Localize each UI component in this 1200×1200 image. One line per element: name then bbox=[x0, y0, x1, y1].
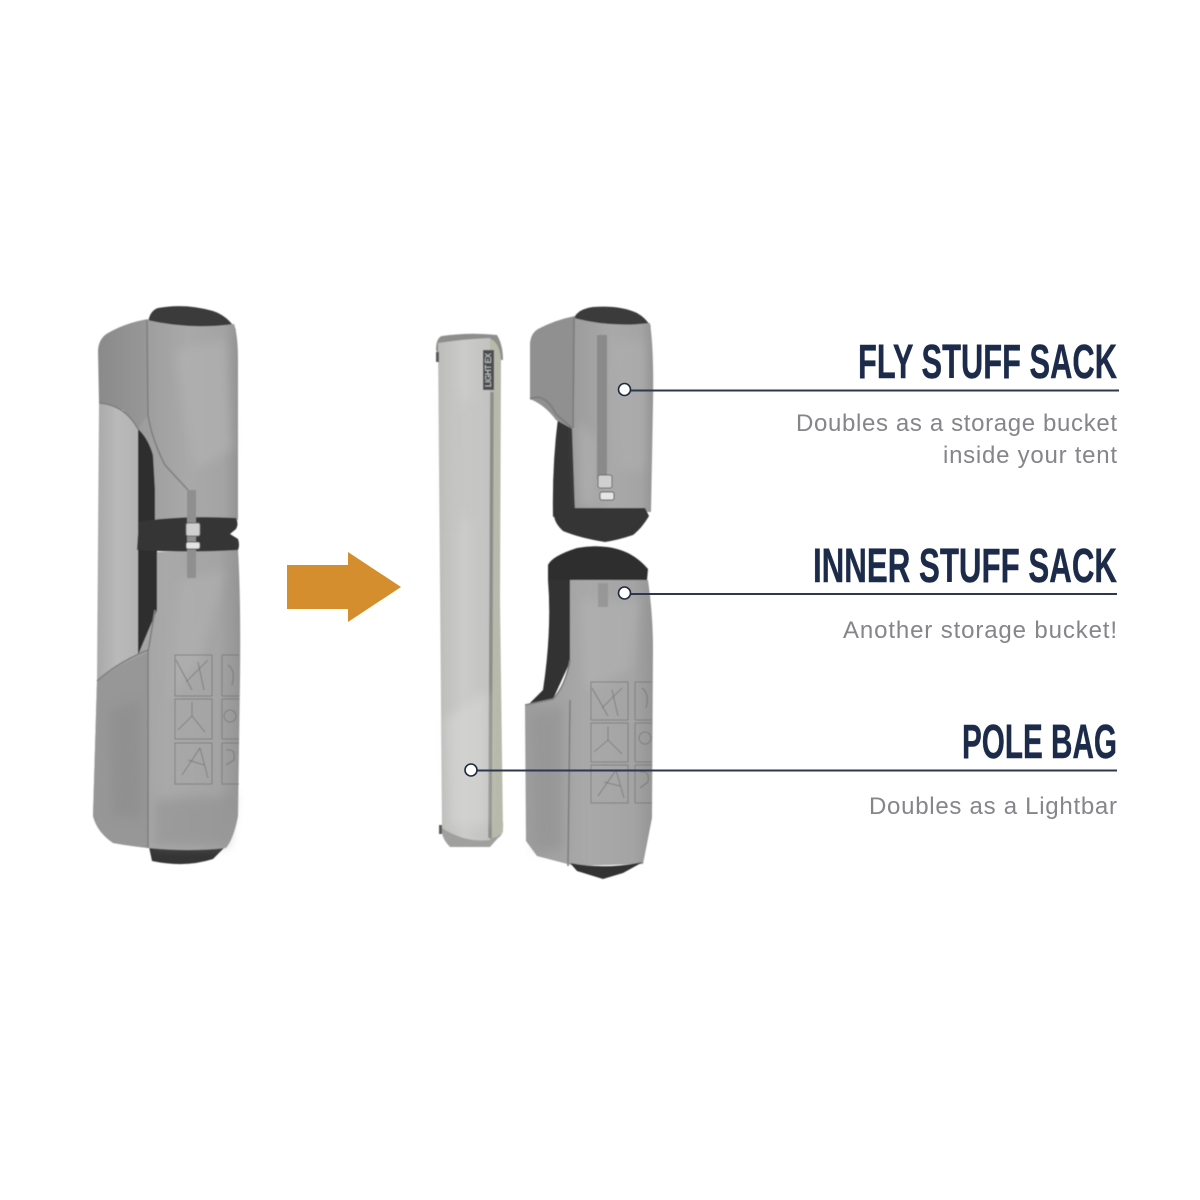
marker dot bbox=[618, 587, 630, 599]
marker dot bbox=[465, 764, 477, 776]
inner sack top cap bbox=[548, 546, 648, 580]
leader line bbox=[630, 390, 1119, 392]
fly sack body bbox=[572, 318, 653, 512]
inner sack body bbox=[525, 580, 653, 866]
bundle strap and buckle bbox=[186, 490, 200, 578]
bundle seams bbox=[97, 320, 188, 848]
fly sack buckle bbox=[598, 475, 614, 500]
inner sack soft folds bbox=[532, 600, 640, 850]
callout: fly stuff sack bbox=[618, 336, 1119, 469]
inner sack dark side bbox=[528, 580, 572, 705]
description: Doubles as a Lightbar bbox=[869, 793, 1117, 820]
bundle dark window bbox=[137, 428, 160, 655]
bundle top cap bbox=[148, 306, 236, 334]
packed tent bundle bbox=[93, 306, 240, 864]
pole bag bottom cuff bbox=[441, 822, 503, 847]
callout: pole bag bbox=[465, 716, 1117, 820]
fly sack strap bbox=[597, 335, 607, 479]
fly stuff sack bbox=[530, 307, 653, 542]
bundle upper sleeve side bbox=[98, 319, 156, 429]
bundle soft folds bbox=[110, 340, 235, 846]
pole bag top cuff bbox=[436, 334, 503, 360]
pole bag folds bbox=[445, 400, 488, 825]
inner stuff sack bbox=[525, 546, 653, 879]
pole bag label tag: LIGHT EX bbox=[484, 352, 493, 387]
fly sack top cap bbox=[574, 307, 651, 330]
pole bag green side strip bbox=[489, 338, 503, 838]
pole bag bbox=[436, 334, 503, 847]
bundle middle dark band bbox=[137, 517, 239, 552]
pole bag main body bbox=[438, 338, 490, 840]
bundle light panel bbox=[97, 403, 138, 681]
inner sack bottom cap bbox=[570, 862, 643, 879]
inner sack seams bbox=[525, 660, 570, 866]
description bbox=[796, 410, 1117, 469]
bundle bottom cap bbox=[148, 842, 229, 864]
description: Another storage bucket! bbox=[843, 617, 1117, 644]
fly sack soft folds bbox=[578, 340, 645, 505]
bundle printed instructions bbox=[175, 655, 239, 784]
fly sack left flap bbox=[530, 316, 575, 430]
description: Doubles as a storage bucket bbox=[796, 410, 1117, 437]
pole bag label tag bbox=[483, 350, 494, 390]
fly sack dark inner side bbox=[553, 418, 576, 517]
fly sack bottom cap bbox=[554, 508, 649, 542]
description: inside your tent bbox=[943, 442, 1117, 469]
bundle lower body bbox=[93, 549, 240, 850]
inner sack strap loop bbox=[598, 583, 608, 607]
arrow bbox=[287, 552, 401, 622]
bundle upper sleeve bbox=[138, 320, 238, 520]
inner sack printed instructions bbox=[591, 682, 652, 803]
fly sack flap seam bbox=[530, 318, 574, 428]
pole bag seam bbox=[490, 392, 492, 838]
leader line bbox=[477, 770, 1117, 772]
callout: inner stuff sack bbox=[618, 540, 1117, 644]
pole bag side loops bbox=[436, 352, 442, 834]
leader line bbox=[630, 593, 1117, 595]
marker dot bbox=[618, 384, 630, 396]
